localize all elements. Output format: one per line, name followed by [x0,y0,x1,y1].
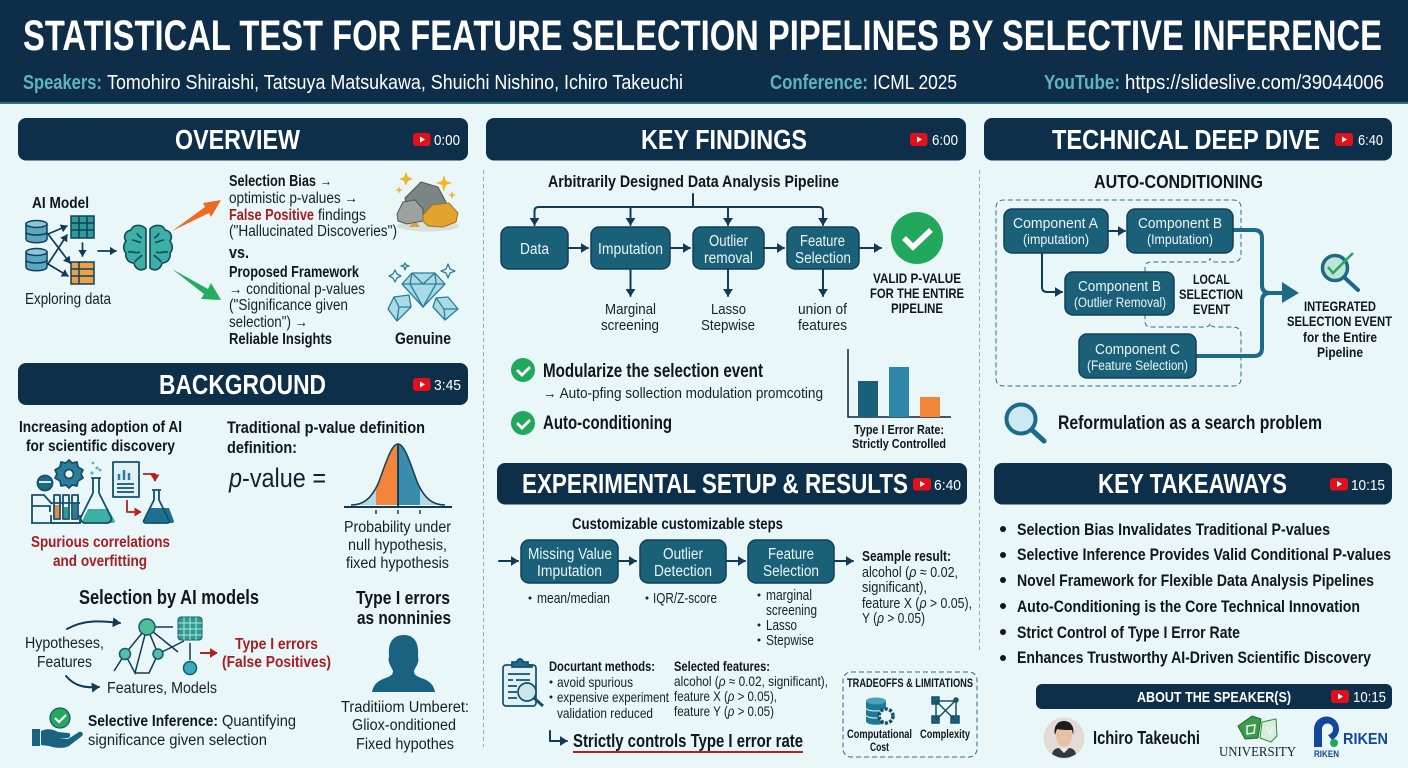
text: selective inference: Selective Inference: [88,713,218,730]
label: local selection event: LOCAL [1193,271,1230,287]
takeaways list: Selection Bias Invalidates Traditional P-values [1017,520,1330,539]
box: component B outlier removal: Component B [1078,278,1161,295]
box: feature selection: Feature [768,546,814,563]
box: feature selection: Selection [795,250,851,267]
formula: p-value equals: p-value = [228,463,326,493]
box: missing value imputation: Imputation [537,563,602,580]
experimental heading: EXPERIMENTAL SETUP & RESULTS [522,468,908,499]
technical deep dive heading: 6:40 [1358,132,1383,149]
text: sample result: Seample result: [862,549,951,565]
experimental heading: 6:40 [934,477,961,494]
box: missing value imputation: Missing Value [528,546,612,563]
label: computational cost: Computational [847,729,912,741]
text: traditional p-value definition [227,419,425,457]
box: imputation [591,227,670,269]
about the speakers heading: ABOUT THE SPEAKER(S) [1137,689,1291,706]
text: type I errors false positives: Type I errors [235,636,318,653]
label: complexity: Complexity [920,729,970,741]
text: selected features: Selected features: [674,658,770,674]
text: selected features: alcohol (ρ ≈ 0.02, significant), [674,673,828,689]
vs label: vs. [229,243,249,262]
text: features, models: Features, Models [107,680,217,697]
icon: check modularize [511,358,535,382]
label: union of features: union of [798,301,848,318]
text: integrated selection event: for the Entire [1303,329,1377,345]
youtube line: YouTube: [1044,72,1120,94]
box: outlier removal [693,227,764,269]
label: local selection event: SELECTION [1179,286,1243,302]
box: imputation: Imputation [598,241,663,258]
text: valid p-value: FOR THE ENTIRE [870,285,964,301]
text: probability under null: fixed hypothesis [346,555,449,572]
subheading: customizable steps: Customizable customizable steps [572,516,783,533]
about the speakers heading [1036,684,1392,709]
text: type I errors false positives: (False Positives) [222,654,331,671]
text: proposed framework [229,264,365,348]
text: traditional p-value definition: Traditional p-value definition [227,419,425,437]
text: selected features [674,658,828,719]
text: integrated selection event [1287,298,1392,360]
box: component C: (Feature Selection) [1087,358,1188,373]
text: selection bias: ("Hallucinated Discoveries") [229,223,397,240]
text: selection bias: optimistic p-values → [229,190,358,207]
text: docurtant methods [549,658,669,721]
background heading [18,363,468,405]
text: iqr z-score: IQR/Z-score [653,591,717,607]
text: increasing adoption: Increasing adoption of AI [19,419,182,436]
box: feature selection: Feature [800,233,845,250]
text: integrated selection event: Pipeline [1317,344,1363,360]
text: proposed framework: → conditional p-values [229,281,365,298]
speakers line: Tomohiro Shiraishi, Tatsuya Matsukawa, Shuichi Nishino, Ichiro Takeuchi [107,72,683,94]
arrow: features to models [66,676,99,687]
overview heading: OVERVIEW [175,124,300,155]
chart: bell curve [344,444,452,514]
technical deep dive heading: TECHNICAL DEEP DIVE [1052,124,1320,155]
text: mean median: mean/median [537,591,610,607]
label: lasso stepwise [701,301,755,334]
box: component C: Component C [1095,341,1180,358]
exploring data label: Exploring data [25,291,111,308]
box: missing value imputation [521,540,618,583]
box: component A [1004,209,1108,253]
genuine label: Genuine [395,329,451,348]
dashed selection boundaries [996,200,1241,386]
label: lasso stepwise: Lasso [711,301,746,318]
text: probability under null: Probability under [344,519,451,536]
label: computational cost: Cost [870,742,889,754]
about the speakers heading: 10:15 [1353,689,1386,706]
connectors: integrated arrows [1196,230,1299,356]
label: marginal screening: Marginal [605,301,656,318]
text: selective inference: Quantifying [222,713,296,730]
panel: technical deep dive [984,118,1392,441]
key takeaways heading [994,463,1392,504]
key findings heading [486,118,966,160]
key takeaways heading: 10:15 [1351,477,1385,494]
technical deep dive heading [984,118,1392,160]
box: feature selection: Selection [763,563,819,580]
text: traditional fixed hypotheses: Gliox-onditioned [352,717,456,734]
panel: about the speakers [1036,684,1392,760]
text: docurtant methods: avoid spurious [557,674,633,690]
takeaways list [1000,520,1391,667]
label: union of features: features [798,317,847,334]
panel: background [18,363,469,753]
box: outlier detection: Outlier [663,546,703,563]
icon: rocks with gold [395,172,459,232]
text: traditional fixed hypotheses: Fixed hypothes [356,736,454,753]
arrows: pipeline flow [569,248,881,296]
youtube line: https://slideslive.com/39044006 [1125,72,1384,94]
text: valid p-value: VALID P-VALUE [873,270,961,286]
box: component A: Component A [1013,215,1098,232]
text: strictly controlled: Type I Error Rate: [854,422,944,437]
panel: overview [18,118,468,348]
text: docurtant methods: validation reduced [557,705,653,721]
conference line [770,72,957,94]
text: docurtant methods: expensive experiment [557,689,669,705]
text: docurtant methods: Docurtant methods: [549,658,655,674]
text: sample result: feature X (ρ > 0.05), [862,596,972,612]
university logo: UNIVERSITY [1219,745,1296,760]
text: feature selection methods: Lasso [766,618,797,634]
label: marginal screening [601,301,659,334]
arrow: hypotheses to network [67,621,120,629]
text: traditional p-value definition: definition: [227,439,297,457]
background heading: 3:45 [434,377,461,394]
box: data: Data [520,241,549,258]
text: hypotheses, features: Hypotheses, [25,635,104,652]
heading: type I errors as nonninies: Type I errors [356,587,450,608]
key findings heading: 6:00 [932,132,958,149]
text: feature selection methods: screening [766,603,817,619]
icon: hand with check [32,708,83,748]
speakers line: Speakers: [23,72,102,94]
header banner [0,0,1408,104]
speaker name: Ichiro Takeuchi [1093,728,1200,748]
text: traditional fixed hypotheses [341,699,469,753]
heading: type I errors as nonninies [356,587,451,628]
text: strictly controls: Strictly controls Type I error rate [573,731,803,751]
text: auto-conditioning: Auto-conditioning [543,413,672,434]
connector: top branch arrows [534,194,823,225]
key takeaways heading: KEY TAKEAWAYS [1098,468,1287,499]
heading: type I errors as nonninies: as nonninies [357,607,451,628]
box: component B outlier removal: (Outlier Removal) [1074,295,1166,310]
text: selected features: feature Y (ρ > 0.05) [674,703,774,719]
label: computational cost [847,729,912,754]
icon: magnifier with check [1322,253,1358,290]
text: selection bias: → [320,173,332,190]
icon: valid check [891,212,943,264]
text: modularize: Modularize the selection event [543,361,764,382]
conference line: ICML 2025 [873,72,957,94]
panel: experimental setup and results [497,463,977,757]
AI model label: AI Model [32,195,89,212]
experimental heading [497,463,967,504]
speaker photo [1044,718,1084,758]
box: outlier detection [640,540,726,583]
overview heading [18,118,468,160]
text: traditional fixed hypotheses: Traditiiom Umberet: [341,699,469,716]
label: local selection event [1179,271,1243,317]
icon: science lab [31,460,174,523]
arrow: to reliable insights [172,269,221,300]
pipeline title: Arbitrarily Designed Data Analysis Pipeline [548,173,839,191]
text: valid p-value [870,270,964,316]
box: component B imputation: Component B [1138,215,1222,232]
connector: A to B [1109,230,1125,232]
box: component B imputation [1127,209,1233,253]
text: valid p-value: PIPELINE [891,300,943,316]
label: union of features [798,301,848,334]
box: outlier removal: Outlier [709,233,748,250]
text: integrated selection event: INTEGRATED [1304,298,1376,314]
label: lasso stepwise: Stepwise [701,317,755,334]
box: feature selection [748,540,834,583]
text: reformulation: Reformulation as a search problem [1058,413,1322,434]
label: local selection event: EVENT [1193,301,1230,317]
tradeoffs heading: TRADEOFFS & LIMITATIONS [847,678,973,690]
box: component C [1079,334,1196,378]
label: marginal screening: screening [601,317,659,334]
riken logo: RIKEN [1314,749,1339,760]
text: probability under null [344,519,451,572]
text: type I errors false positives [222,636,331,671]
text: selection bias: False Positive [229,207,314,224]
text: strictly controlled [852,422,946,451]
background heading: BACKGROUND [159,369,326,400]
university logo [1219,716,1296,760]
text: spurious correlations: Spurious correlations [31,534,170,551]
arrow: to type I errors [200,652,217,654]
box: feature selection [787,227,859,269]
box: outlier removal: removal [704,250,753,267]
text: selective inference [88,713,296,749]
heading: selection by AI models: Selection by AI models [79,587,259,609]
box: data [501,227,568,269]
chart: type I error rate bars [848,349,951,417]
connector: A to B2 [1042,253,1062,292]
arrows: experiment flow [499,560,853,562]
riken logo: RIKEN [1343,731,1388,748]
text: sample result: Y (ρ > 0.05) [862,611,925,627]
icon: check auto-conditioning [511,411,535,435]
text: proposed framework: Reliable Insights [229,331,332,348]
text: proposed framework: selection") → [229,314,308,331]
text: feature selection methods: Stepwise [766,633,814,649]
panel: key findings [486,118,966,451]
icon: data flow [26,216,116,284]
arrow: to false positives [172,200,221,231]
text: strictly controlled: Strictly Controlled [852,436,946,451]
box: component B outlier removal [1065,272,1174,315]
overview heading: 0:00 [434,132,460,149]
icon: clipboard with magnifier [503,659,543,706]
text: auto-pfing: → Auto-pfing sollection modulation promcoting [543,385,823,402]
text: proposed framework: Proposed Framework [229,264,359,281]
text: increasing adoption: for scientific discovery [26,438,175,455]
text: increasing adoption [19,419,182,455]
panel: key takeaways [994,463,1392,667]
text: selective inference: significance given selection [88,732,267,749]
box: outlier detection: Detection [654,563,712,580]
text: hypotheses, features [25,635,104,671]
takeaways list: Strict Control of Type I Error Rate [1017,623,1240,642]
icon: network [114,617,202,674]
icon: brain [124,225,172,270]
icon: database with gear [866,698,893,725]
box: component A: (imputation) [1023,232,1089,247]
icon: person silhouette [372,635,435,692]
text: selection bias: Selection Bias [229,173,316,190]
text: sample result [862,549,972,627]
icon: diamonds [388,263,458,321]
text: spurious correlations [31,534,170,570]
auto-conditioning heading: AUTO-CONDITIONING [1094,172,1263,192]
text: sample result: alcohol (ρ ≈ 0.02, [862,565,958,581]
text: feature selection methods [758,588,817,649]
conference line: Conference: [770,72,868,94]
text: proposed framework: ("Significance given [229,297,348,314]
riken logo [1314,716,1388,760]
arrow: conclusion elbow [550,731,567,741]
text: selection bias: findings [318,207,366,224]
panel: tradeoffs and limitations [843,672,977,757]
text: spurious correlations: and overfitting [53,553,147,570]
text: selected features: feature X (ρ > 0.05), [674,688,777,704]
text: probability under null: null hypothesis, [348,537,447,554]
box: component B imputation: (Imputation) [1147,232,1213,247]
text: feature selection methods: marginal [766,588,812,604]
text: selection bias [229,173,397,240]
text: hypotheses, features: Features [37,654,92,671]
icon: complexity [932,697,959,723]
icon: magnifier [1006,404,1044,441]
text: sample result: significant), [862,580,927,596]
key findings heading: KEY FINDINGS [641,124,807,155]
